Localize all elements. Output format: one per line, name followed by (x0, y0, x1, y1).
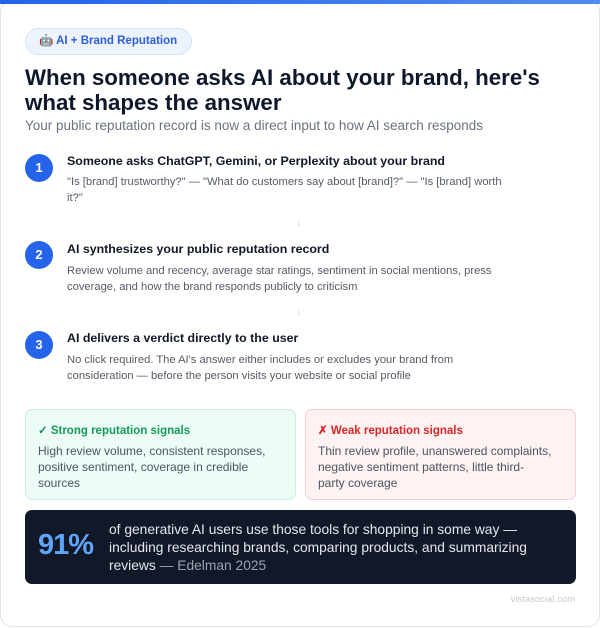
strong heading: ✓ Strong reputation signals (38, 425, 190, 437)
panel: weak signals (305, 409, 576, 500)
step 1 text: "Is [brand] trustworthy?" — "What do customers say about [brand]?" — "Is [brand] worth (67, 176, 502, 188)
step 2 heading: AI synthesizes your public reputation record (67, 242, 329, 256)
step 2 number (25, 241, 53, 269)
stat text: of generative AI users use those tools for shopping in some way — (109, 522, 517, 537)
step 3 text: consideration — before the person visits your website or social profile (67, 370, 411, 382)
step 3 heading: AI delivers a verdict directly to the user (67, 331, 298, 345)
step 2 text: coverage, and how the brand responds publicly to criticism (67, 281, 357, 293)
weak text: Thin review profile, unanswered complaints, (318, 444, 551, 458)
step 1 text (67, 176, 502, 204)
weak text: negative sentiment patterns, little third- (318, 460, 524, 474)
title: When someone asks AI about your brand, here's (25, 65, 540, 90)
badge (25, 28, 192, 55)
step 3 text (67, 354, 453, 382)
arrow 1: ↓ (296, 218, 301, 229)
title (25, 65, 540, 115)
stat panel (25, 510, 576, 584)
step 3 number (25, 331, 53, 359)
stat text (109, 522, 527, 573)
step 2 text (67, 265, 492, 293)
strong text: High review volume, consistent responses, (38, 444, 265, 458)
weak text: party coverage (318, 476, 397, 490)
step 2 text: Review volume and recency, average star ratings, sentiment in social mentions, press (67, 265, 492, 277)
strong text: sources (38, 476, 80, 490)
step 3 (25, 331, 453, 382)
title: what shapes the answer (25, 90, 282, 115)
strong text: positive sentiment, coverage in credible (38, 460, 248, 474)
stat text: including researching brands, comparing products, and summarizing (109, 540, 527, 555)
step 3 text: No click required. The AI's answer either includes or excludes your brand from (67, 354, 453, 366)
step 1 number (25, 154, 53, 182)
stat text: reviews — Edelman 2025 (109, 558, 266, 573)
weak heading: ✗ Weak reputation signals (318, 425, 463, 437)
step 1 text: it?" (67, 192, 83, 204)
badge: 🤖 AI + Brand Reputation (39, 35, 177, 47)
step 1 number: 1 (35, 160, 43, 175)
step 2 number: 2 (35, 247, 43, 262)
step 2 (25, 241, 492, 293)
stat number: 91% (38, 529, 93, 561)
weak text (318, 444, 551, 490)
step 1 (25, 154, 502, 204)
strong text (38, 444, 265, 490)
arrow 2: ↓ (296, 307, 301, 318)
footer brand: vistasocial.com (511, 594, 575, 605)
subtitle: Your public reputation record is now a direct input to how AI search responds (25, 118, 483, 133)
panel: strong signals (25, 409, 296, 500)
step 1 heading: Someone asks ChatGPT, Gemini, or Perplexity about your brand (67, 154, 445, 168)
step 3 number: 3 (35, 337, 43, 352)
